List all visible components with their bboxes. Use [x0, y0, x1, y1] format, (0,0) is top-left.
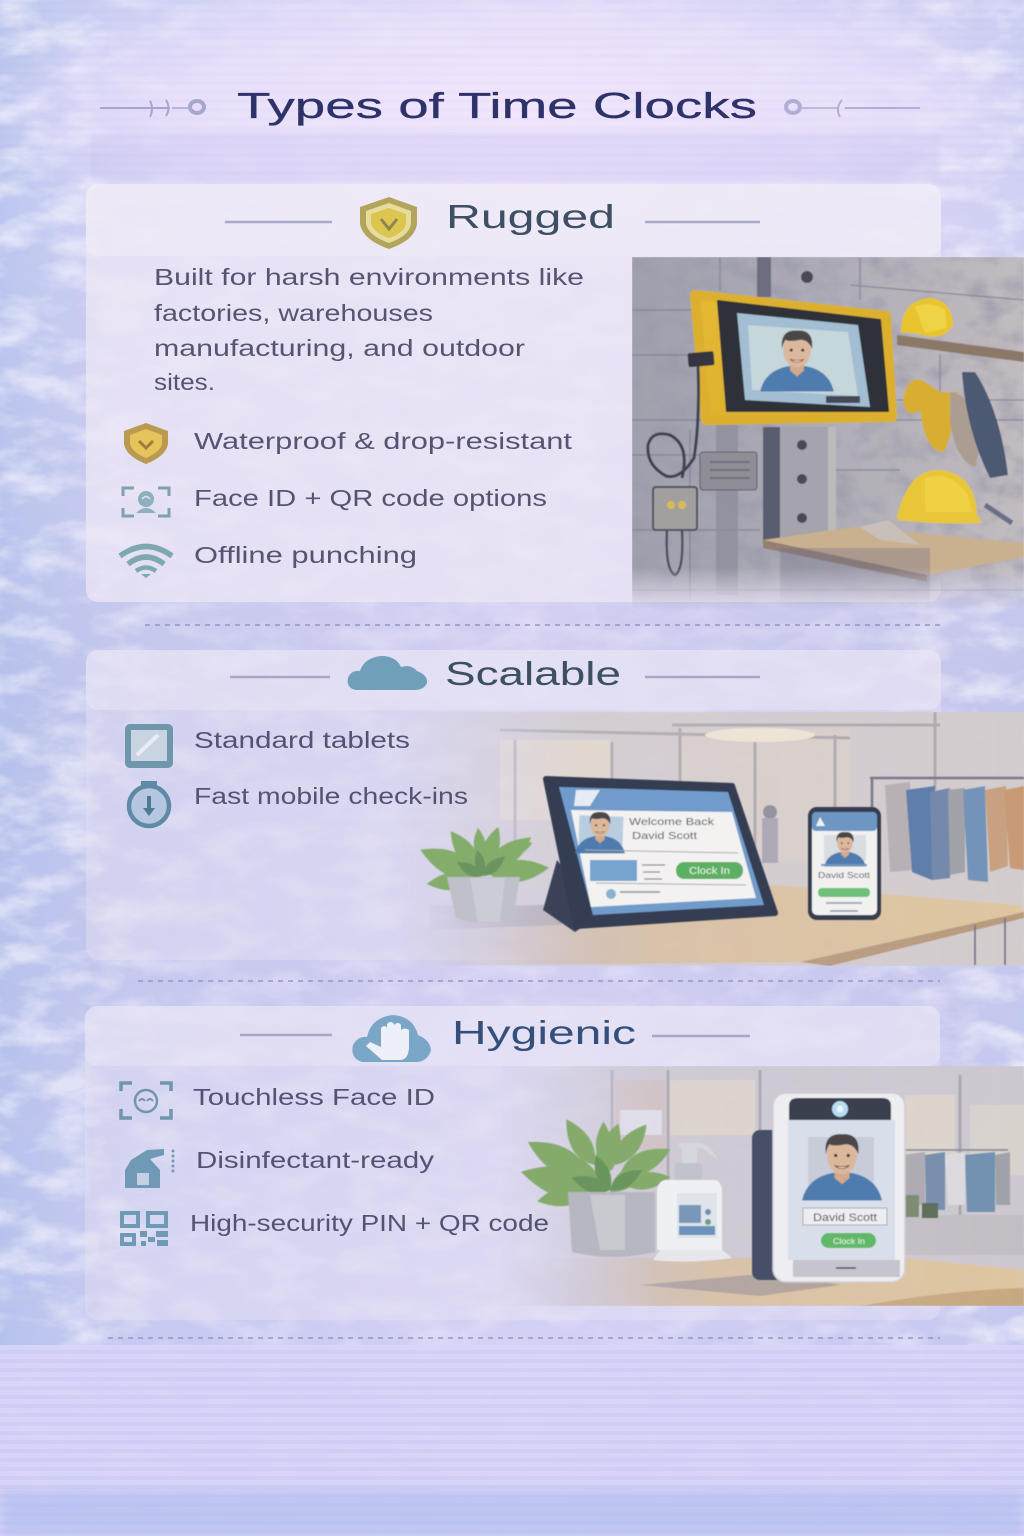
- tablet: Welcome Back: [629, 816, 715, 828]
- icon: cloud: [348, 656, 427, 690]
- divider: [138, 980, 940, 982]
- feature: disinfectant: [125, 1147, 435, 1188]
- title: Types of Time Clocks: [237, 85, 757, 126]
- hygienic header band: [85, 1006, 940, 1066]
- icon: qr code: [120, 1211, 168, 1246]
- icon: wifi: [120, 546, 172, 578]
- counter: [578, 1258, 1024, 1306]
- rugged description: Built for harsh environments like: [154, 264, 584, 290]
- feature: face id: Face ID + QR code options: [194, 485, 547, 511]
- hanging gloves: [903, 372, 1008, 478]
- feature: standard tablets: [125, 724, 410, 768]
- wall-mounted rugged tablet: [687, 295, 892, 420]
- panel: hygienic: [85, 1006, 1024, 1320]
- icon: spray: [125, 1149, 174, 1188]
- feature: offline: [120, 542, 417, 578]
- feature: touchless face id: Touchless Face ID: [193, 1084, 435, 1110]
- hygienic backdrop: [500, 1066, 1024, 1306]
- feature: pin and qr: High-security PIN + QR code: [190, 1210, 549, 1236]
- feature: disinfectant: Disinfectant-ready: [196, 1147, 435, 1173]
- cable and junction boxes: [648, 366, 757, 575]
- icon: tablet: [125, 724, 173, 768]
- feature: face id: [123, 485, 547, 516]
- rugged header band: [86, 184, 941, 256]
- feature: touchless face id: [121, 1083, 435, 1118]
- panel: rugged: [86, 184, 1024, 610]
- hygienic heading: [240, 1014, 750, 1062]
- face recognition terminal: Clock In: [833, 1236, 865, 1246]
- scalable panel card: [86, 650, 941, 960]
- scalable heading: [230, 655, 760, 692]
- divider: [145, 624, 940, 626]
- clothing rack: [900, 1150, 1010, 1218]
- hygienic devices and props: [517, 1093, 1010, 1282]
- feature: offline: Offline punching: [194, 542, 417, 568]
- scalable heading: Scalable: [445, 655, 621, 692]
- icon: face scan: [123, 488, 169, 516]
- tablet: Clock In: [689, 866, 730, 877]
- icon: small shield: [124, 423, 168, 464]
- counter: [400, 885, 1024, 966]
- feature: pin and qr: [120, 1210, 549, 1246]
- plant: [517, 1114, 675, 1257]
- title ornament right: [786, 100, 920, 117]
- phone: David Scott: [818, 871, 871, 880]
- title: [100, 85, 757, 126]
- feature: waterproof: [124, 423, 573, 464]
- face recognition terminal: [752, 1093, 905, 1282]
- spray bottle: [653, 1143, 732, 1262]
- face recognition terminal: David Scott: [813, 1212, 877, 1224]
- rugged illustration: [632, 257, 1024, 610]
- rugged description: factories, warehouses: [154, 300, 433, 326]
- tablet: [543, 779, 775, 932]
- rugged heading: [225, 197, 760, 249]
- shelf and hard hats: [897, 298, 1024, 524]
- tablet: David Scott: [632, 830, 697, 842]
- workbench: [762, 520, 1024, 596]
- rugged description: manufacturing, and outdoor: [154, 335, 525, 361]
- scalable devices and props: [415, 778, 1024, 932]
- clothing rack: [870, 778, 1024, 892]
- hygienic heading: Hygienic: [452, 1014, 636, 1051]
- rugged panel card: [86, 184, 941, 602]
- feature: fast mobile: Fast mobile check-ins: [194, 783, 468, 809]
- icon: stopwatch: [129, 783, 169, 826]
- divider: [108, 1337, 940, 1339]
- feature: standard tablets: Standard tablets: [194, 727, 410, 753]
- phone: [808, 807, 881, 920]
- rugged heading: Rugged: [446, 198, 615, 235]
- scalable header band: [86, 650, 941, 710]
- scalable backdrop: [400, 712, 1024, 966]
- title ornament left: [100, 100, 204, 117]
- icon: face frame: [121, 1083, 171, 1118]
- icon: shield: [360, 197, 417, 249]
- feature: fast mobile: [129, 783, 468, 826]
- rugged description: [154, 264, 584, 395]
- hygienic panel card: [85, 1006, 940, 1320]
- panel: scalable: [86, 650, 1024, 966]
- icon: hand on cloud: [352, 1015, 431, 1062]
- feature: waterproof: Waterproof & drop-resistant: [194, 428, 573, 454]
- plant: [415, 824, 550, 923]
- rugged description: sites.: [154, 369, 215, 395]
